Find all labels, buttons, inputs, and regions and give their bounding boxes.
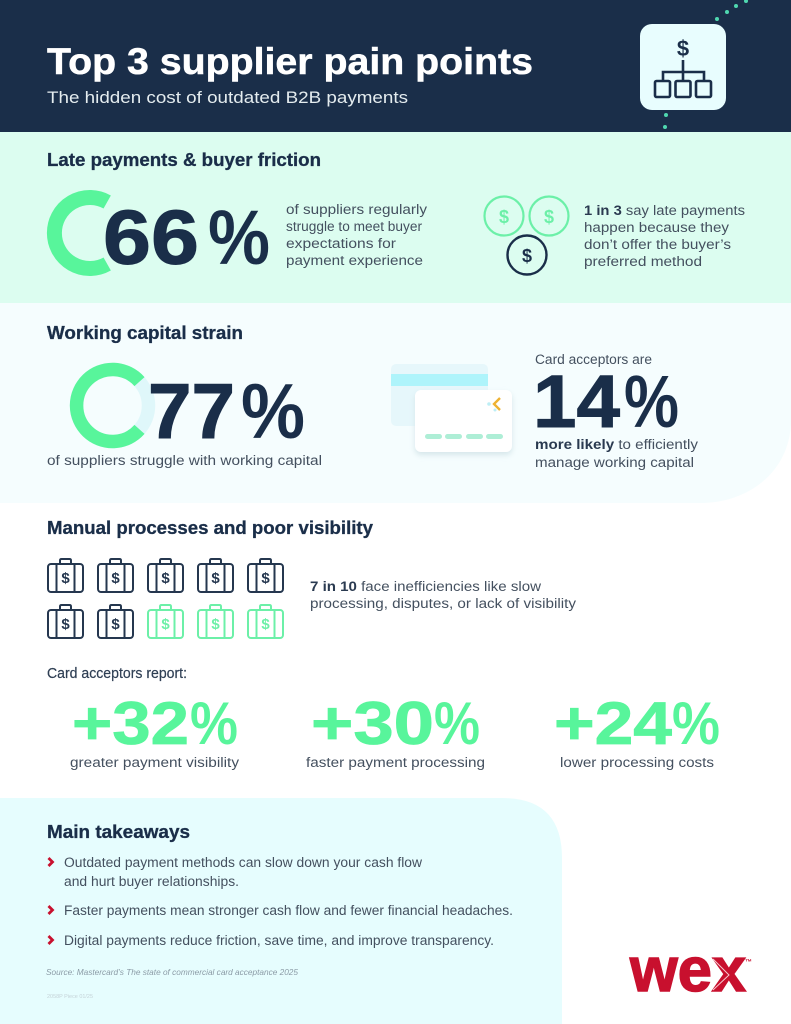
stat: 77% bbox=[148, 367, 305, 455]
text: suppliers struggle: expectations for bbox=[286, 236, 397, 251]
stat: plus 32 percent: % bbox=[190, 690, 238, 757]
text: 7 in 10: processing, disputes, or lack of visibility bbox=[310, 596, 576, 611]
icon: three coins: $ bbox=[499, 207, 509, 227]
text: 7 in 10 bbox=[310, 579, 576, 611]
text: suppliers struggle: of suppliers regularly bbox=[286, 202, 427, 217]
stat: plus 24 percent: +24 bbox=[554, 690, 673, 757]
stat: plus 32 percent bbox=[70, 690, 239, 770]
stat: 77%: 77 bbox=[148, 367, 235, 455]
donut chart: 66 percent bbox=[54, 198, 107, 268]
heading: main takeaways: Main takeaways bbox=[47, 822, 190, 842]
text: one in three: don’t offer the buyer’s bbox=[584, 237, 731, 252]
text: suppliers struggle with working capital: of suppliers struggle with working capital bbox=[47, 453, 322, 468]
text: suppliers struggle: struggle to meet buyer bbox=[286, 219, 423, 234]
stat: 66%: 66 bbox=[103, 195, 199, 281]
stat: 66% bbox=[103, 195, 270, 281]
stat: 14% bbox=[533, 360, 679, 443]
panel: working capital strain bbox=[0, 303, 791, 503]
pictogram: 7 in 10 briefcases: $ bbox=[211, 570, 220, 587]
text: one in three bbox=[584, 203, 745, 269]
heading: manual processes: Manual processes and poor visibility bbox=[47, 518, 373, 538]
pictogram: 7 in 10 briefcases: $ bbox=[161, 570, 170, 587]
icon: payment hierarchy: $ bbox=[677, 36, 689, 61]
takeaway 1: and hurt buyer relationships. bbox=[64, 874, 239, 889]
pictogram: 7 in 10 briefcases: $ bbox=[261, 616, 270, 633]
stat: plus 30 percent bbox=[306, 690, 485, 770]
panel: header bbox=[0, 0, 791, 132]
subheading: card acceptors report: Card acceptors report: bbox=[47, 665, 187, 682]
stat: plus 24 percent: lower processing costs bbox=[560, 755, 714, 770]
takeaway 2: Faster payments mean stronger cash flow and fewer financial headaches. bbox=[64, 903, 513, 918]
subtitle: The hidden cost of outdated B2B payments bbox=[47, 88, 408, 107]
text: one in three: preferred method bbox=[584, 254, 702, 269]
text: more likely: manage working capital bbox=[535, 455, 694, 470]
takeaway 1: Outdated payment methods can slow down your cash flow bbox=[64, 855, 422, 870]
pictogram: 7 in 10 briefcases: $ bbox=[61, 616, 70, 633]
icon: payment hierarchy bbox=[640, 24, 726, 110]
pictogram: 7 in 10 briefcases: $ bbox=[161, 616, 170, 633]
title: Top 3 supplier pain points bbox=[47, 41, 533, 82]
panel: main takeaways bbox=[0, 798, 562, 1024]
panel: manual processes and poor visibility bbox=[47, 518, 720, 770]
text: one in three: 1 in 3 say late payments bbox=[584, 203, 745, 218]
document code: 2058P Piece 01/25 bbox=[47, 994, 93, 1000]
stat: plus 30 percent: +30 bbox=[311, 690, 434, 757]
donut chart: 77 percent bbox=[76, 370, 148, 442]
stat: 77%: % bbox=[241, 367, 305, 455]
takeaway 1 bbox=[48, 855, 422, 889]
heading: late payments: Late payments & buyer friction bbox=[47, 150, 321, 170]
stat: plus 30 percent: % bbox=[434, 690, 480, 757]
text: more likely: more likely to efficiently bbox=[535, 437, 698, 452]
pictogram: 7 in 10 briefcases: $ bbox=[111, 570, 120, 587]
pictogram: 7 in 10 briefcases: $ bbox=[111, 616, 120, 633]
takeaway 3: Digital payments reduce friction, save time, and improve transparency. bbox=[64, 933, 494, 948]
logo: WEX: wex bbox=[629, 936, 746, 1005]
text: card acceptors are: Card acceptors are bbox=[535, 352, 652, 367]
stat: plus 32 percent: +32 bbox=[72, 690, 189, 757]
pictogram: 7 in 10 briefcases: $ bbox=[211, 616, 220, 633]
stat: plus 24 percent bbox=[554, 690, 720, 770]
stat: plus 24 percent: % bbox=[672, 690, 720, 757]
text: suppliers struggle: payment experience bbox=[286, 253, 423, 268]
stat: 66%: % bbox=[208, 195, 270, 281]
pictogram: 7 in 10 briefcases: $ bbox=[261, 570, 270, 587]
icon: three coins: $ bbox=[544, 207, 554, 227]
text: 7 in 10: 7 in 10 face inefficiencies like slow bbox=[310, 579, 541, 594]
stat: 14%: % bbox=[624, 360, 679, 443]
text: suppliers struggle bbox=[286, 202, 427, 268]
stat: 14%: 14 bbox=[533, 360, 620, 443]
panel: late payments and buyer friction bbox=[0, 132, 791, 303]
heading: working capital: Working capital strain bbox=[47, 323, 243, 343]
stat: plus 32 percent: greater payment visibility bbox=[70, 755, 239, 770]
pictogram: 7 in 10 briefcases bbox=[48, 559, 283, 638]
stat: plus 30 percent: faster payment processing bbox=[306, 755, 485, 770]
icon: three coins: $ bbox=[522, 246, 532, 266]
decorative dots bbox=[663, 0, 748, 129]
icon: three coins bbox=[484, 196, 568, 274]
text: one in three: happen because they bbox=[584, 220, 729, 235]
source note: Source: Mastercard’s The state of commercial card acceptance 2025 bbox=[46, 967, 298, 977]
icon: payment cards bbox=[391, 364, 512, 455]
pictogram: 7 in 10 briefcases: $ bbox=[61, 570, 70, 587]
logo: WEX: ™ bbox=[745, 959, 752, 966]
text: more likely bbox=[535, 437, 698, 470]
